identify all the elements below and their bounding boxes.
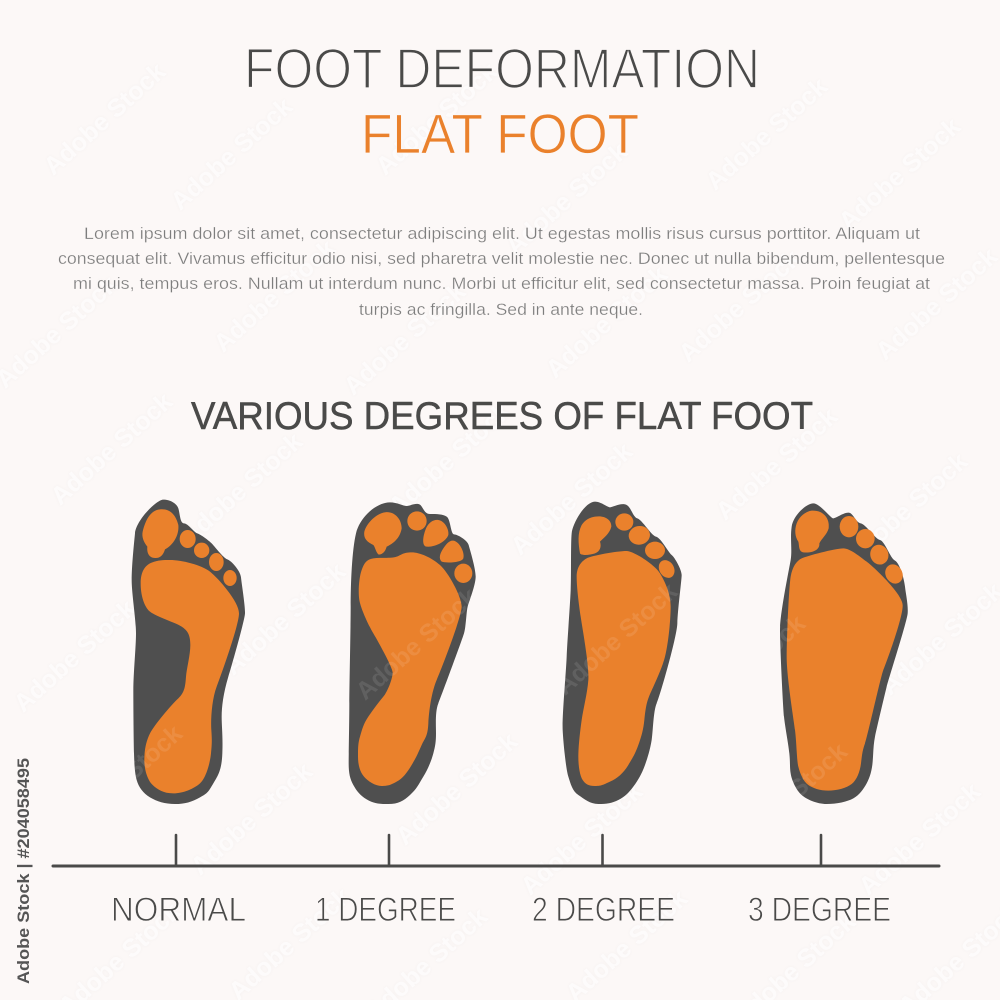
scale axis with ticks [53,835,939,866]
foot: 2 degree [563,502,682,804]
label: 2 degree: 2 DEGREE [532,891,675,929]
label: 1 degree: 1 DEGREE [315,891,456,929]
watermark pattern: Adobe Stock [186,757,318,881]
foot: normal [132,500,245,804]
faint watermark over feet: Adobe Stock [679,609,811,733]
section heading: VARIOUS DEGREES OF FLAT FOOT [191,395,813,438]
watermark pattern: Adobe Stock [391,727,523,851]
faint watermark over feet: Adobe Stock [721,737,853,861]
watermark pattern: Adobe Stock [339,277,471,401]
watermark pattern: Adobe Stock [516,777,648,901]
watermark pattern: Adobe Stock [711,402,843,526]
title: foot deformation: FOOT DEFORMATION [244,37,760,101]
intro paragraph: mi quis, tempus eros. Nullam ut interdum nunc. Morbi ut efficitur elit, sed consectetur massa. Proin feugiat at [73,274,930,293]
watermark pattern: Adobe Stock [39,57,171,181]
watermark pattern: Adobe Stock [541,260,673,384]
watermark pattern: Adobe Stock [219,557,351,681]
intro paragraph [58,224,945,319]
watermark pattern: Adobe Stock [701,72,833,196]
watermark pattern: Adobe Stock [501,137,633,261]
watermark pattern: Adobe Stock [371,57,503,181]
label: 3 degree: 3 DEGREE [748,891,891,929]
watermark pattern: Adobe Stock [871,242,1000,366]
faint watermark over feet: Adobe Stock [351,582,483,706]
intro paragraph: Lorem ipsum dolor sit amet, consectetur adipiscing elit. Ut egestas mollis risus cursus porttitor. Aliquam ut [84,224,920,243]
watermark pattern: Adobe Stock [176,427,308,551]
watermark pattern: Adobe Stock [384,397,516,521]
watermark pattern: Adobe Stock [9,594,141,718]
intro paragraph: consequat elit. Vivamus efficitur odio nisi, sed pharetra velit molestie nec. Donec ut nulla bibendum, pellentesque [58,249,945,268]
watermark pattern: Adobe Stock [506,437,638,561]
foot: 1 degree [349,502,476,804]
label: normal: NORMAL [111,891,246,929]
watermark pattern: Adobe Stock [854,777,986,901]
watermark pattern: Adobe Stock [166,92,298,216]
faint watermark over feet: Adobe Stock [551,577,683,701]
watermark pattern: Adobe Stock [674,244,806,368]
stock id side text: Adobe Stock | #204058495 [14,758,33,984]
watermark pattern: Adobe Stock [841,447,973,571]
intro paragraph: turpis ac fringilla. Sed in ante neque. [359,300,643,319]
foot: 3 degree [780,503,908,804]
watermark pattern: Adobe Stock [209,234,341,358]
faint watermark over feet [56,577,853,861]
watermark pattern: Adobe Stock [834,112,966,236]
subtitle: flat foot: FLAT FOOT [361,102,639,165]
watermark pattern: Adobe Stock [46,387,178,511]
faint watermark over feet: Adobe Stock [56,719,188,843]
